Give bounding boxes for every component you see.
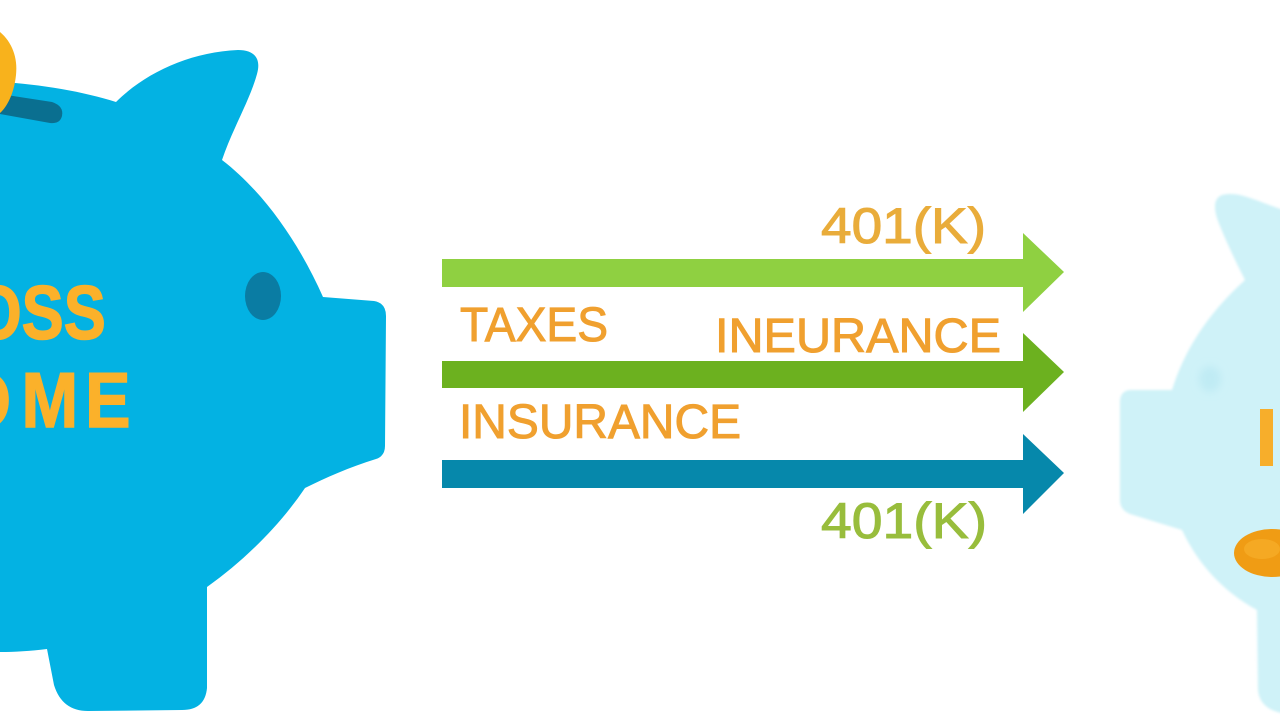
icon: coin xyxy=(0,32,16,113)
label: 401(k) bottom: 401(K) xyxy=(821,493,987,549)
icon: coin xyxy=(1234,529,1280,577)
label: ineurance: INEURANCE xyxy=(715,310,1001,363)
eye xyxy=(1199,366,1221,392)
arrow: middle green xyxy=(442,333,1064,412)
piggy label: gross income xyxy=(0,270,130,444)
piggy label: income xyxy=(1260,409,1273,466)
icon: net income piggy bank xyxy=(1120,194,1280,714)
coin slot xyxy=(0,94,62,123)
label: 401(k) top: 401(K) xyxy=(821,198,986,254)
label: insurance: INSURANCE xyxy=(459,396,741,449)
eye xyxy=(245,272,281,320)
arrow: bottom teal xyxy=(442,434,1064,514)
icon: gross income piggy bank xyxy=(0,32,386,711)
label: taxes: TAXES xyxy=(460,299,608,352)
arrow: top green xyxy=(442,233,1064,312)
